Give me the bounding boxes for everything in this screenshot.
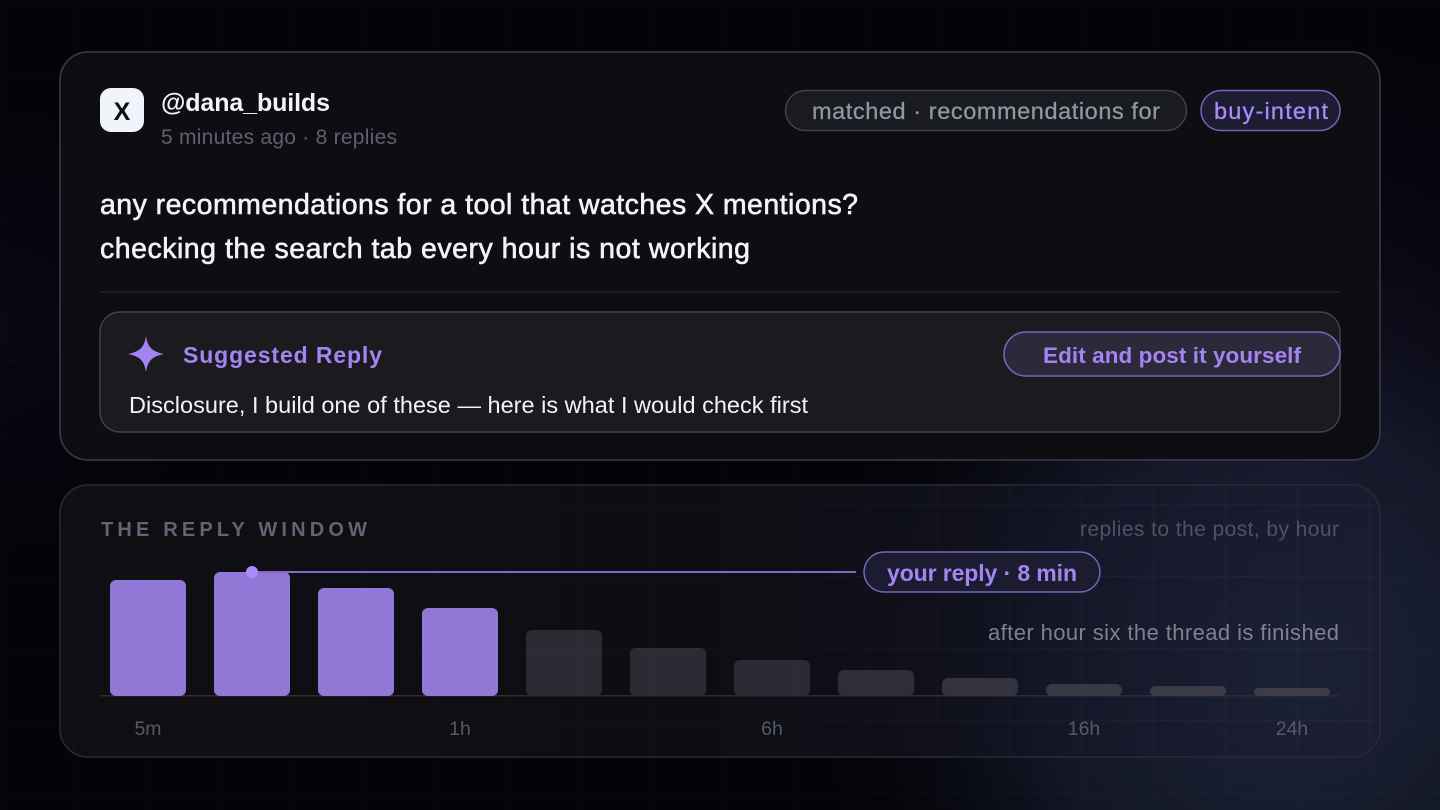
button: edit and post: Edit and post it yourself [1043, 343, 1302, 368]
reply text: Disclosure, I build one of these — here is what I would check first [129, 392, 808, 418]
axis labels: 6h [761, 718, 783, 740]
annotation: after hour six the thread is finished [988, 620, 1339, 645]
post text [100, 189, 858, 265]
panel: reply window chart [60, 485, 1380, 757]
chart heading: THE REPLY WINDOW [101, 519, 367, 541]
chip: buy-intent [1201, 90, 1340, 130]
chip: matched phrase: matched · recommendations for [812, 98, 1160, 124]
panel: suggested reply [100, 312, 1340, 432]
author handle: @dana_builds [161, 89, 330, 117]
callout: your reply: your reply · 8 min [887, 560, 1077, 586]
panel: post card [60, 52, 1380, 460]
post metadata: 5 minutes ago · 8 replies [161, 126, 397, 149]
icon: X avatar [100, 88, 144, 132]
axis labels: 5m [134, 718, 162, 740]
icon: sparkle [128, 336, 164, 372]
callout: your reply [246, 552, 1100, 592]
chip: matched phrase [786, 90, 1186, 130]
axis labels [134, 718, 1308, 740]
axis labels: 1h [449, 718, 471, 740]
post text: any recommendations for a tool that watches X mentions? [100, 189, 858, 221]
bar chart [110, 572, 1330, 696]
icon: X avatar: X [114, 98, 131, 126]
chip: buy-intent: buy-intent [1214, 98, 1328, 124]
post text: checking the search tab every hour is not working [100, 233, 750, 265]
button: edit and post [1004, 332, 1340, 376]
chart subtitle: replies to the post, by hour [1080, 518, 1339, 541]
axis labels: 16h [1068, 718, 1100, 740]
axis labels: 24h [1276, 718, 1308, 740]
suggested reply heading: Suggested Reply [183, 342, 382, 368]
